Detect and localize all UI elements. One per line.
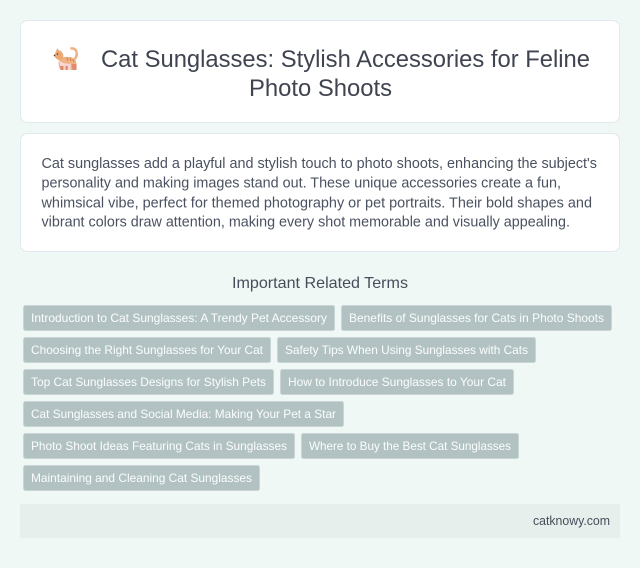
tag: Introduction to Cat Sunglasses: A Trendy Pet Accessory: [31, 311, 327, 325]
footer: [20, 504, 620, 538]
icon: cat: [54, 47, 78, 70]
tag: [302, 434, 518, 458]
tag: Benefits of Sunglasses for Cats in Photo Shoots: [349, 311, 604, 325]
tag: Photo Shoot Ideas Featuring Cats in Sunglasses: [31, 439, 287, 453]
tag: [342, 306, 612, 330]
tag: [278, 338, 536, 362]
title: Cat Sunglasses: Stylish Accessories for Feline: [101, 46, 590, 73]
description text: Cat sunglasses add a playful and stylish touch to photo shoots, enhancing the subject's: [42, 156, 597, 172]
description text: personality and making images stand out. These unique accessories create a fun,: [42, 176, 561, 192]
tag: How to Introduce Sunglasses to Your Cat: [288, 375, 507, 389]
description panel: [20, 134, 620, 252]
description text: whimsical vibe, perfect for themed photography or pet portraits. Their bold shapes and: [41, 196, 592, 212]
tag: Choosing the Right Sunglasses for Your Cat: [31, 343, 264, 357]
tag: Cat Sunglasses and Social Media: Making Your Pet a Star: [31, 407, 336, 421]
tag: [24, 370, 274, 394]
tag: Safety Tips When Using Sunglasses with Cats: [285, 343, 528, 357]
section heading: Important Related Terms: [232, 275, 408, 292]
tag: [24, 338, 270, 362]
tag: Where to Buy the Best Cat Sunglasses: [309, 439, 511, 453]
description text: [41, 156, 597, 230]
related terms tags: [24, 306, 612, 490]
tag: Maintaining and Cleaning Cat Sunglasses: [31, 471, 252, 485]
header panel: [20, 20, 620, 122]
tag: [24, 306, 334, 330]
tag: [24, 434, 294, 458]
tag: Top Cat Sunglasses Designs for Stylish Pets: [31, 375, 266, 389]
description text: vibrant colors draw attention, making every shot memorable and visually appealing.: [42, 214, 570, 230]
tag: [280, 370, 514, 394]
footer source text: catknowy.com: [533, 514, 610, 528]
title: Photo Shoots: [249, 75, 392, 102]
tag: [24, 402, 344, 426]
tag: [24, 466, 260, 490]
title: [101, 46, 590, 102]
